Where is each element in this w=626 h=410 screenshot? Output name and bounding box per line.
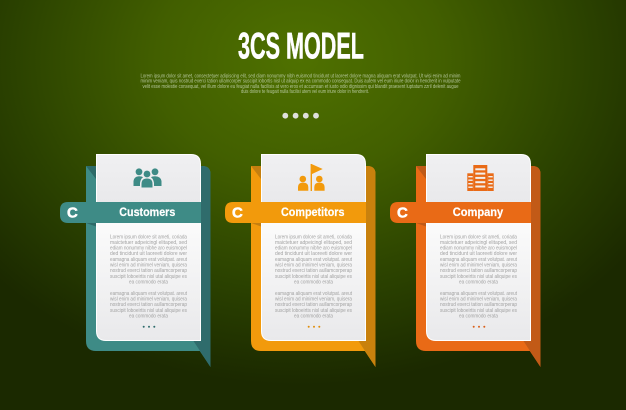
body text: company: ded tincidunt uit laoreeti dolore wer <box>440 251 517 257</box>
label band: customers: C <box>67 204 78 222</box>
body text: company: Lorem ipsum dolore sit ameti, coriada <box>440 234 517 240</box>
body text: competitors: ediam nonummy nibhe aro euismopel <box>275 246 352 252</box>
dots: competitors <box>308 326 320 328</box>
body text: customers: eamagna aliquam erat volutpat. areut <box>110 291 188 297</box>
body text: competitors: eamagna aliquam erat volutpat. areut <box>275 257 353 263</box>
body text: company: wisl enim ad minimel veniam, quisera <box>440 297 517 303</box>
label band: company <box>390 202 531 223</box>
card sheet <box>96 154 201 341</box>
title: 3CS MODEL <box>238 26 364 66</box>
body text: customers: suscipit loboeirtis nisl utal aliquipe es <box>110 308 187 314</box>
body text: customers: nostrud exerci tation aullamcorperap <box>110 302 187 308</box>
body text: company: nostrud exerci tation aullamcorperap <box>440 268 517 274</box>
card backing <box>86 166 210 367</box>
body text: customers <box>110 234 188 320</box>
label band: competitors: Competitors <box>281 207 344 219</box>
icon: office building <box>467 165 494 191</box>
icon: people group <box>134 168 162 188</box>
body text: customers: maictetuer adpeicingl elitaped, sed <box>110 240 187 246</box>
label band: customers <box>60 202 201 223</box>
body text: competitors: suscipit loboeirtis nisl utal aliquipe es <box>275 308 352 314</box>
body text: competitors <box>275 234 353 320</box>
body text: customers: ded tincidunt uit laoreeti dolore wer <box>110 251 187 257</box>
label band: competitors <box>225 202 366 223</box>
body text: competitors: nostrud exerci tation aullamcorperap <box>275 302 352 308</box>
body text: competitors: maictetuer adpeicingl elitaped, sed <box>275 240 352 246</box>
body text: company: suscipit loboeirtis nisl utal aliquipe es <box>440 274 517 280</box>
icon: flag and two people <box>298 164 325 191</box>
label band: competitors: C <box>232 204 243 222</box>
intro text <box>140 74 461 95</box>
body text: competitors: wisl enim ad minimel veniam, quisera <box>275 297 352 303</box>
body text: competitors: suscipit loboeirtis nisl utal aliquipe es <box>275 274 352 280</box>
body text: customers: eamagna aliquam erat volutpat. areut <box>110 257 188 263</box>
body text: competitors: eamagna aliquam erat volutpat. areut <box>275 291 353 297</box>
body text: company: eamagna aliquam erat volutpat. areut <box>440 257 518 263</box>
panel: competitors <box>225 154 376 367</box>
panel: customers <box>60 154 210 367</box>
body text: competitors: ea commodo erata <box>294 314 333 320</box>
body text: customers: ea commodo erata <box>129 314 168 320</box>
dots: customers <box>143 326 155 328</box>
panel: company <box>390 154 540 367</box>
body text: customers: wisl enim ad minimel veniam, quisera <box>110 262 187 268</box>
body text: company: eamagna aliquam erat volutpat. areut <box>440 291 518 297</box>
label band: customers: Customers <box>119 207 175 219</box>
body text: competitors: ded tincidunt uit laoreeti dolore wer <box>275 251 352 257</box>
body text: company: ea commodo erata <box>459 279 498 285</box>
body text: competitors: ea commodo erata <box>294 279 333 285</box>
body text: competitors: Lorem ipsum dolore sit ameti, coriada <box>275 234 352 240</box>
intro text: Lorem ipsum dolor sit amet, consectetuer adipiscing elit, sed diam nonummy nibh euismod tincidunt ut laoreet dolore magna aliquam erat volutpat. Ut wisi enim ad minim <box>140 74 460 80</box>
body text: company: suscipit loboeirtis nisl utal aliquipe es <box>440 308 517 314</box>
card sheet <box>261 154 366 341</box>
card backing <box>251 166 376 367</box>
label band: company: Company <box>453 207 504 219</box>
body text: customers: wisl enim ad minimel veniam, quisera <box>110 297 187 303</box>
intro text: minim veniam, quis nostrud exerci tation ullamcorper suscipit lobortis nisl ut aliquip ex ea commodo consequat. Duis autem vel eum iriure dolor in hendrerit in vulputate <box>140 79 461 85</box>
card sheet <box>426 154 531 341</box>
label band: company: C <box>397 204 408 222</box>
body text: company: ea commodo erata <box>459 314 498 320</box>
pagination dots <box>282 113 319 119</box>
body text: company: wisl enim ad minimel veniam, quisera <box>440 262 517 268</box>
body text: company: maictetuer adpeicingl elitaped, sed <box>440 240 517 246</box>
body text: customers: suscipit loboeirtis nisl utal aliquipe es <box>110 274 187 280</box>
card backing <box>416 166 540 367</box>
body text: customers: ediam nonummy nibhe aro euismopel <box>110 246 187 252</box>
body text: customers: nostrud exerci tation aullamcorperap <box>110 268 187 274</box>
intro text: velit esse molestie consequat, vel illum dolore eu feugiat nulla facilisis at vero eros et accumsan et iusto odio dignissim qui blandit praesent luptatum zzril delenit augue <box>142 84 459 90</box>
body text: customers: Lorem ipsum dolore sit ameti, coriada <box>110 234 187 240</box>
body text: competitors: wisl enim ad minimel veniam, quisera <box>275 262 352 268</box>
intro text: duis dolore te feugait nulla facilisi utem vel eum iriure dolor in hendrerit. <box>241 89 369 95</box>
body text: company: nostrud exerci tation aullamcorperap <box>440 302 517 308</box>
body text: company: ediam nonummy nibhe aro euismopel <box>440 246 517 252</box>
dots: company <box>473 326 485 328</box>
body text: company <box>440 234 518 320</box>
body text: competitors: nostrud exerci tation aullamcorperap <box>275 268 352 274</box>
body text: customers: ea commodo erata <box>129 279 168 285</box>
